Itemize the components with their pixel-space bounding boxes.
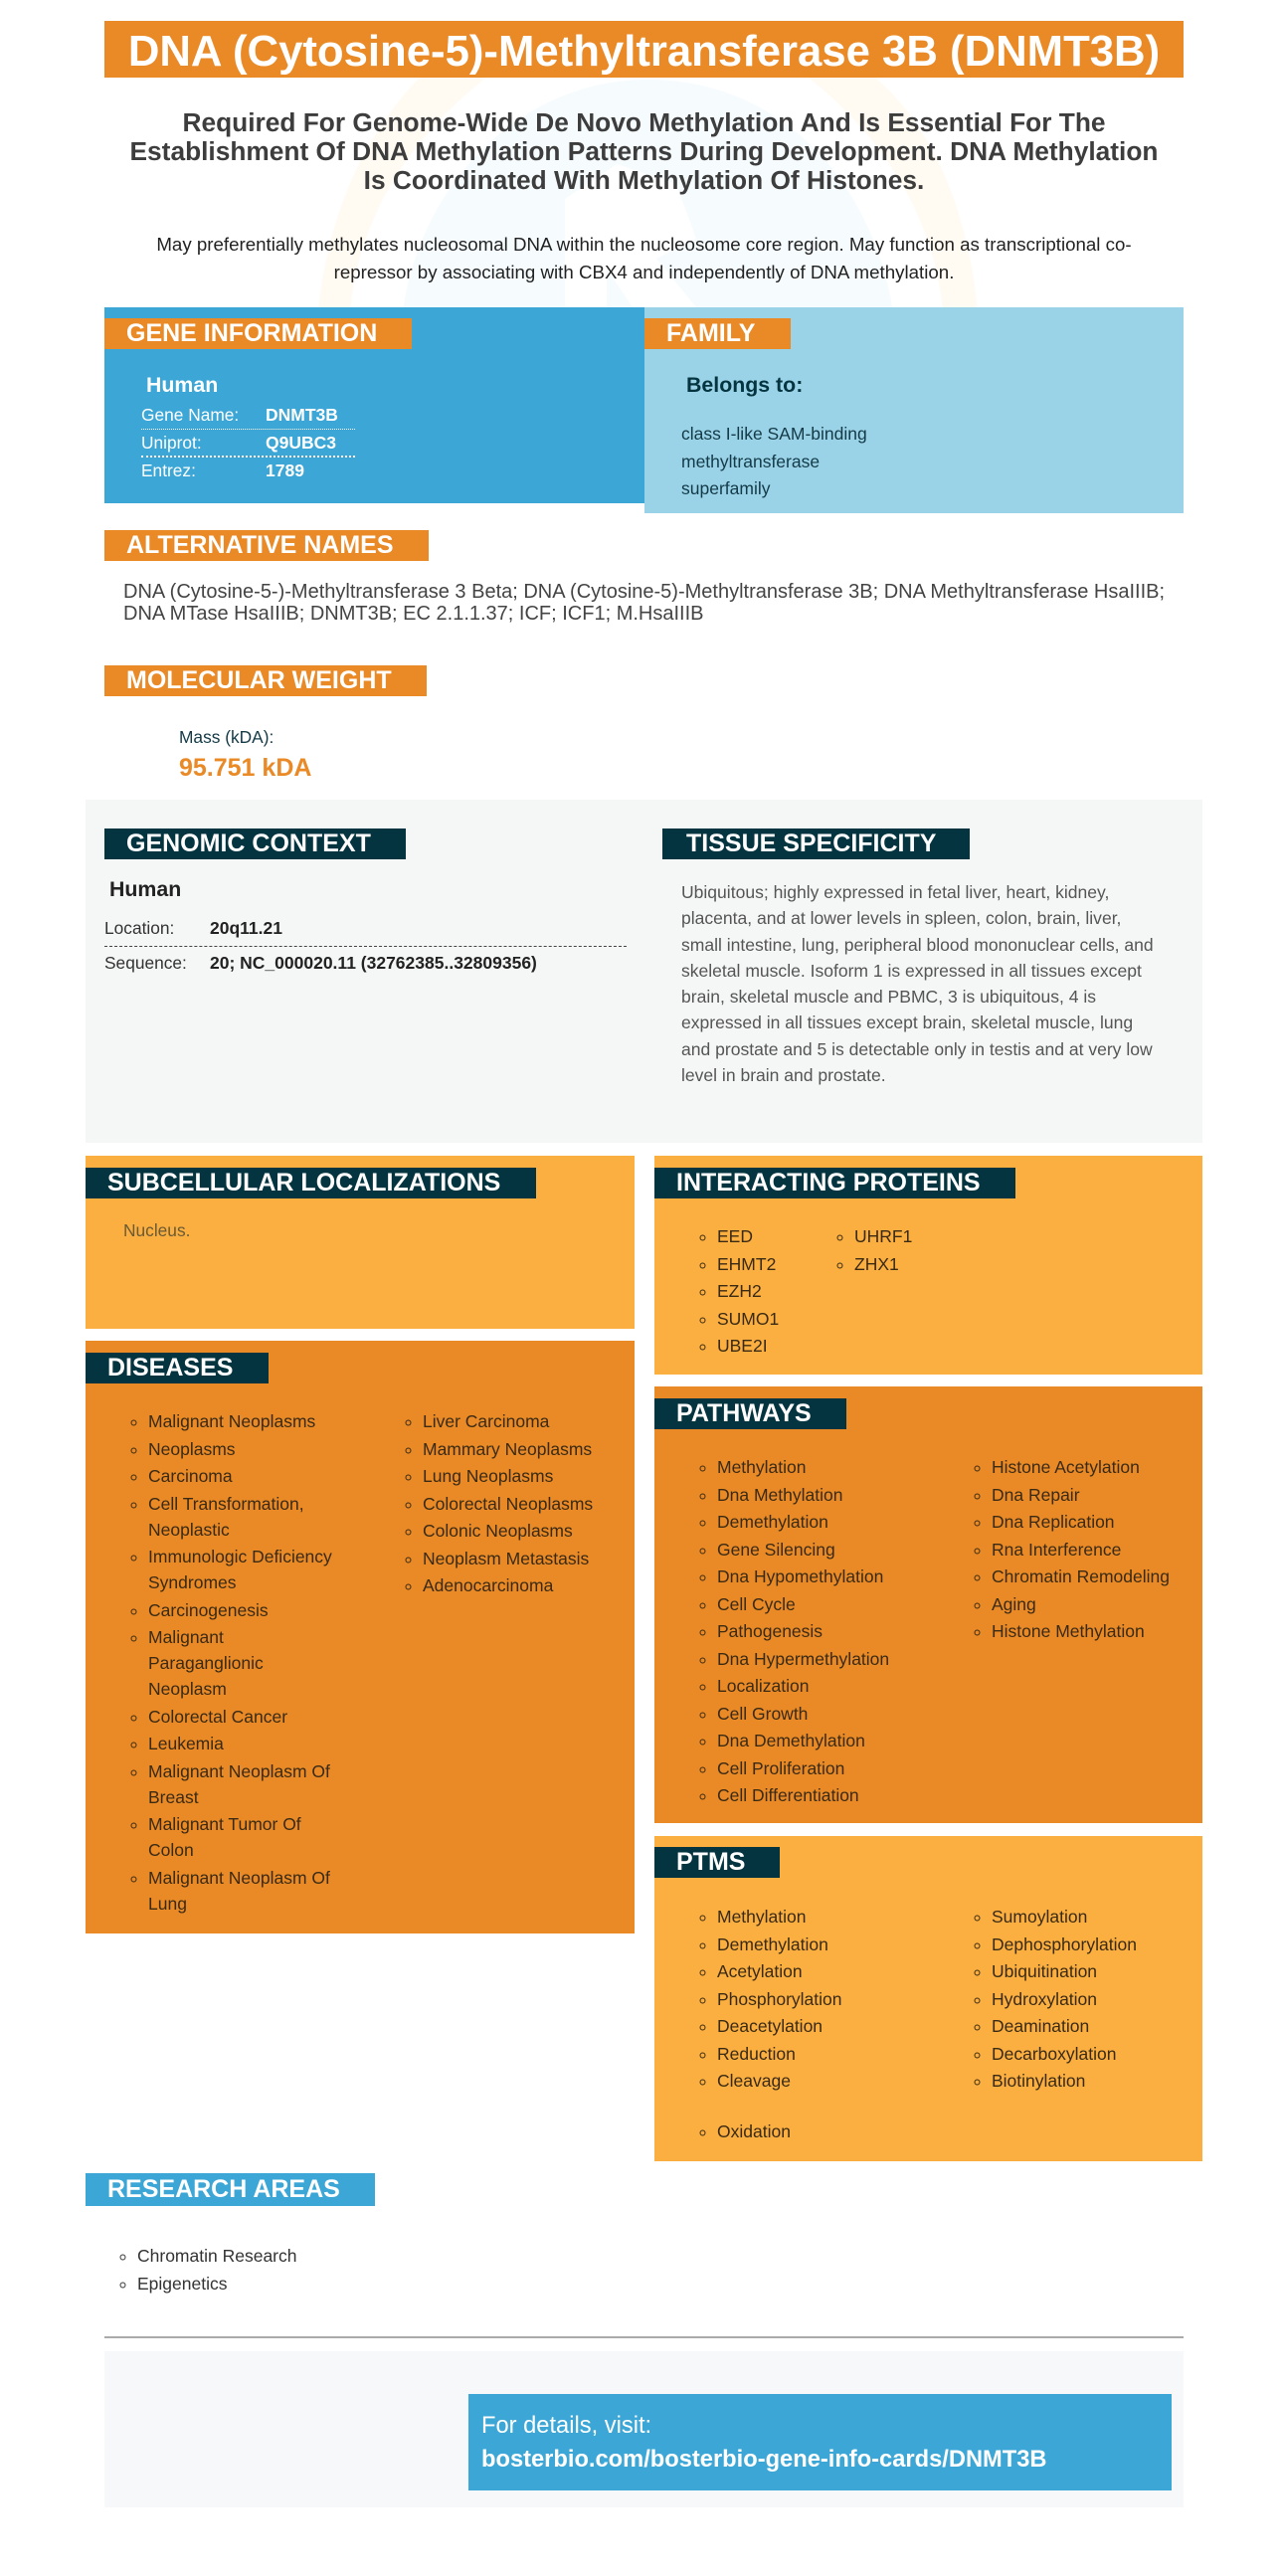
heading: diseases — [86, 1353, 269, 1383]
diseases list column 1: Malignant Neoplasms — [148, 1411, 315, 1431]
localization text: Nucleus. — [123, 1220, 190, 1240]
diseases list column 1: Carcinoma — [148, 1466, 233, 1486]
tissue specificity text: skeletal muscle. Isoform 1 is expressed in all tissues except — [681, 961, 1142, 981]
diseases list column 1: Immunologic Deficiency — [148, 1547, 332, 1566]
panel: family — [644, 307, 1184, 513]
entrez row: 1789 — [266, 460, 304, 480]
diseases list column 2: Mammary Neoplasms — [423, 1438, 592, 1458]
ptms list column 1: Oxidation — [717, 2121, 791, 2141]
heading: gene information: GENE INFORMATION — [126, 319, 377, 347]
proteins list column 1: SUMO1 — [717, 1309, 779, 1329]
sequence row: Sequence: — [104, 953, 187, 973]
diseases list column 1: Lung — [148, 1894, 187, 1914]
location row: Location: — [104, 918, 174, 938]
ptms list column 2: Hydroxylation — [992, 1989, 1097, 2009]
proteins list column 2: ZHX1 — [854, 1253, 899, 1273]
location row: 20q11.21 — [210, 918, 282, 938]
ptms list column 1: Demethylation — [717, 1933, 828, 1953]
pathways list column 1: Demethylation — [717, 1512, 828, 1532]
family text — [681, 424, 867, 498]
pathways list column 2: Histone Acetylation — [992, 1457, 1140, 1477]
diseases list column 1: Neoplastic — [148, 1520, 230, 1540]
pathways list column 1 — [700, 1457, 889, 1805]
gene name row: DNMT3B — [266, 405, 338, 425]
heading: family: FAMILY — [666, 319, 755, 347]
panel: footer — [104, 2351, 1184, 2507]
diseases list column 2 — [406, 1411, 593, 1595]
pathways list column 1: Dna Hypermethylation — [717, 1649, 889, 1669]
pathways list column 1: Methylation — [717, 1457, 806, 1477]
background watermark logo — [318, 78, 977, 307]
diseases list column 1: Neoplasm — [148, 1679, 227, 1699]
ptms list column 1: Deacetylation — [717, 2016, 823, 2036]
pathways list column 1: Cell Growth — [717, 1703, 808, 1723]
pathways list column 1: Gene Silencing — [717, 1540, 835, 1560]
ptms list column 1: Cleavage — [717, 2071, 791, 2091]
diseases list column 1: Colon — [148, 1840, 194, 1860]
research areas list — [119, 2246, 296, 2294]
ptms list column 2: Sumoylation — [992, 1907, 1087, 1927]
heading: pathways: PATHWAYS — [676, 1399, 812, 1427]
panel: diseases — [86, 1341, 635, 1933]
summary text: May preferentially methylates nucleosomal DNA within the nucleosome core region. May function as transcriptional co- — [156, 234, 1132, 255]
heading: pathways — [654, 1398, 846, 1429]
tissue specificity text: expressed in all tissues except brain, skeletal muscle, lung — [681, 1012, 1133, 1032]
species label: Human — [109, 877, 181, 901]
alternative names text: DNA MTase HsaIIIB; DNMT3B; EC 2.1.1.37; ICF; ICF1; M.HsaIIIB — [123, 603, 704, 625]
heading: subcellular localizations: SUBCELLULAR LOCALIZATIONS — [107, 1169, 500, 1196]
heading: ptms — [654, 1847, 780, 1878]
proteins list column 1: EHMT2 — [717, 1253, 776, 1273]
details label: For details, visit: — [481, 2413, 651, 2439]
pathways list column 2: Rna Interference — [992, 1540, 1121, 1560]
proteins list column 1 — [700, 1226, 779, 1356]
proteins list column 2: UHRF1 — [854, 1226, 912, 1246]
diseases list column 2: Lung Neoplasms — [423, 1466, 553, 1486]
research areas list: Chromatin Research — [137, 2246, 296, 2266]
diseases list column 1: Carcinogenesis — [148, 1599, 269, 1619]
entrez row: Entrez: — [141, 460, 196, 480]
diseases list column 1: Malignant Neoplasm Of — [148, 1760, 330, 1780]
panel: gene information — [104, 307, 644, 503]
pathways list column 1: Dna Methylation — [717, 1484, 842, 1504]
belongs to label: Belongs to: — [686, 373, 803, 397]
pathways list column 2 — [975, 1457, 1170, 1641]
pathways list column 2: Dna Replication — [992, 1512, 1115, 1532]
heading: ptms: PTMS — [676, 1848, 745, 1876]
panel: ptms — [654, 1836, 1202, 2161]
pathways list column 2: Aging — [992, 1593, 1036, 1613]
summary text — [156, 234, 1132, 282]
callout: details link — [468, 2394, 1172, 2490]
heading: interacting proteins: INTERACTING PROTEINS — [676, 1169, 981, 1196]
diseases list column 2: Neoplasm Metastasis — [423, 1548, 589, 1567]
subtitle: Required For Genome-Wide De Novo Methylation And Is Essential For The — [182, 107, 1106, 137]
tissue specificity text: placenta, and at lower levels in spleen, colon, brain, liver, — [681, 908, 1121, 928]
heading: diseases: DISEASES — [107, 1354, 233, 1381]
gene name row: Gene Name: — [141, 405, 239, 425]
gene name row — [141, 402, 355, 430]
pathways list column 1: Pathogenesis — [717, 1621, 823, 1641]
tissue specificity text: Ubiquitous; highly expressed in fetal liver, heart, kidney, — [681, 882, 1109, 902]
ptms list column 1: Methylation — [717, 1907, 806, 1927]
ptms list column 2 — [975, 1907, 1137, 2091]
tissue specificity text: small intestine, lung, peripheral blood mononuclear cells, and — [681, 935, 1154, 955]
proteins list column 1: UBE2I — [717, 1336, 768, 1356]
diseases list column 1 — [131, 1411, 332, 1914]
heading: alternative names: ALTERNATIVE NAMES — [126, 531, 394, 559]
alternative names text — [123, 581, 1165, 625]
uniprot row — [141, 430, 355, 458]
ptms list column 1: Phosphorylation — [717, 1989, 841, 2009]
ptms list column 1 — [700, 1907, 841, 2141]
ptms list column 2: Ubiquitination — [992, 1961, 1097, 1981]
title: DNA (Cytosine-5)-Methyltransferase 3B (DNMT3B) — [128, 27, 1160, 76]
ptms list column 2: Dephosphorylation — [992, 1933, 1137, 1953]
alternative names text: DNA (Cytosine-5-)-Methyltransferase 3 Beta; DNA (Cytosine-5)-Methyltransferase 3B; DNA Methyltransferase HsaIIIB; — [123, 581, 1165, 603]
heading: tissue specificity: TISSUE SPECIFICITY — [686, 829, 936, 857]
mass value: 95.751 kDA — [179, 754, 311, 782]
species label: Human — [146, 373, 218, 397]
summary text: repressor by associating with CBX4 and independently of DNA methylation. — [334, 262, 954, 282]
heading: molecular weight: MOLECULAR WEIGHT — [126, 666, 392, 694]
panel: interacting proteins — [654, 1156, 1202, 1375]
proteins list column 2 — [837, 1226, 912, 1273]
diseases list column 2: Liver Carcinoma — [423, 1411, 549, 1431]
pathways list column 1: Localization — [717, 1676, 809, 1696]
diseases list column 1: Malignant Neoplasm Of — [148, 1868, 330, 1888]
uniprot row: Uniprot: — [141, 433, 202, 453]
pathways list column 2: Histone Methylation — [992, 1621, 1145, 1641]
entrez row — [141, 460, 304, 480]
tissue specificity text: level in brain and prostate. — [681, 1065, 886, 1085]
proteins list column 1: EED — [717, 1226, 753, 1246]
family text: methyltransferase — [681, 452, 820, 471]
diseases list column 2: Colorectal Neoplasms — [423, 1494, 593, 1514]
pathways list column 1: Cell Differentiation — [717, 1785, 859, 1805]
diseases list column 1: Malignant — [148, 1627, 224, 1647]
ptms list column 1: Acetylation — [717, 1961, 803, 1981]
research areas list: Epigenetics — [137, 2274, 227, 2294]
family text: class I-like SAM-binding — [681, 424, 867, 444]
pathways list column 2: Dna Repair — [992, 1484, 1080, 1504]
diseases list column 1: Cell Transformation, — [148, 1494, 304, 1514]
panel: pathways — [654, 1386, 1202, 1823]
pathways list column 1: Dna Demethylation — [717, 1731, 865, 1750]
heading: research areas: RESEARCH AREAS — [107, 2175, 340, 2203]
ptms list column 2: Decarboxylation — [992, 2043, 1116, 2063]
subtitle — [130, 107, 1158, 195]
diseases list column 1: Breast — [148, 1786, 199, 1806]
panel: subcellular localizations — [86, 1156, 635, 1329]
tissue specificity text — [681, 882, 1154, 1085]
mass label: Mass (kDA): — [179, 727, 274, 747]
subtitle: Establishment Of DNA Methylation Patterns During Development. DNA Methylation — [130, 136, 1158, 166]
ptms list column 2: Biotinylation — [992, 2071, 1085, 2091]
diseases list column 1: Syndromes — [148, 1572, 237, 1592]
pathways list column 2: Chromatin Remodeling — [992, 1566, 1170, 1586]
heading: family — [644, 318, 791, 349]
pathways list column 1: Dna Hypomethylation — [717, 1566, 883, 1586]
family text: superfamily — [681, 478, 770, 498]
diseases list column 1: Leukemia — [148, 1734, 224, 1753]
diseases list column 1: Colorectal Cancer — [148, 1707, 287, 1727]
diseases list column 2: Colonic Neoplasms — [423, 1521, 573, 1541]
ptms list column 1: Reduction — [717, 2043, 796, 2063]
heading: genomic context: GENOMIC CONTEXT — [126, 829, 371, 857]
uniprot row: Q9UBC3 — [266, 433, 336, 453]
diseases list column 2: Adenocarcinoma — [423, 1575, 553, 1595]
diseases list column 1: Neoplasms — [148, 1438, 236, 1458]
pathways list column 1: Cell Cycle — [717, 1593, 796, 1613]
proteins list column 1: EZH2 — [717, 1281, 762, 1301]
details url: bosterbio.com/bosterbio-gene-info-cards/DNMT3B — [481, 2447, 1047, 2473]
heading: research areas — [86, 2173, 375, 2206]
pathways list column 1: Cell Proliferation — [717, 1758, 844, 1778]
ptms list column 2: Deamination — [992, 2016, 1089, 2036]
tissue specificity text: and prostate and 5 is detectable only in testis and at very low — [681, 1039, 1153, 1059]
sequence row: 20; NC_000020.11 (32762385..32809356) — [210, 953, 537, 973]
subtitle: Is Coordinated With Methylation Of Histones. — [364, 165, 924, 195]
panel: genomic context and tissue specificity — [86, 800, 1202, 1143]
diseases list column 1: Paraganglionic — [148, 1653, 264, 1673]
tissue specificity text: brain, skeletal muscle and PBMC, 3 is ubiquitous, 4 is — [681, 987, 1096, 1007]
diseases list column 1: Malignant Tumor Of — [148, 1814, 301, 1834]
location row — [104, 915, 627, 947]
